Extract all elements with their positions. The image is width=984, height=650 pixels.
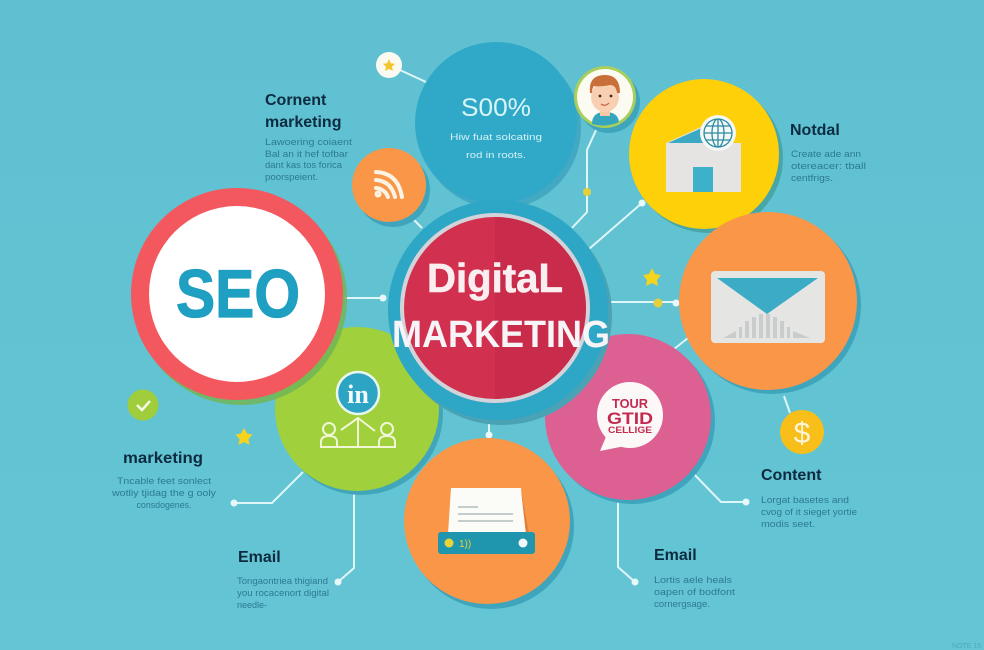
icon: printer: 1))	[459, 539, 471, 550]
icon: speech bubble: GTID	[607, 409, 653, 428]
icon: speech bubble: TOUR	[612, 396, 649, 411]
text block: email left: Tongaontriea thigiand	[237, 576, 328, 587]
panel: pink social circle	[545, 334, 715, 504]
text block: email right: Email	[654, 547, 697, 564]
text block: marketing: Tncable feet sonlect	[117, 476, 211, 487]
text block: email right: Lortis aele heals	[654, 575, 732, 586]
text block: notdal: Notdal	[790, 122, 840, 139]
panel: SEO circle	[131, 188, 347, 405]
panel: small orange wifi circle	[352, 148, 430, 227]
stat value: S00%	[461, 94, 531, 122]
panel: central digital marketing hub: MARKETING	[392, 314, 610, 356]
icon: avatar	[574, 66, 640, 133]
panel: yellow portal circle	[629, 79, 783, 233]
text block: notdal: otereacer: tball	[791, 161, 866, 172]
icon: dollar coin: $	[794, 417, 811, 450]
text block: content marketing	[265, 92, 352, 183]
icon: linkedin network: in	[347, 380, 369, 409]
icon: envelope	[711, 271, 825, 343]
text block: marketing: consdogenes.	[136, 500, 192, 511]
SEO label: SEO	[176, 256, 300, 332]
stat caption: Hiw fuat solcating	[450, 132, 542, 143]
text block: marketing: wotliy tjidag the g ooly	[111, 488, 216, 499]
text block: content marketing: poorspeient.	[265, 172, 318, 183]
panel: green linkedin circle	[275, 327, 443, 495]
icon: green check	[128, 390, 158, 420]
text block: content marketing: marketing	[265, 114, 341, 131]
icon: house with globe	[666, 115, 741, 192]
text block: content	[761, 467, 857, 530]
text block: email left: you rocacenort digital	[237, 588, 329, 599]
text block: marketing: marketing	[123, 450, 203, 467]
text block: email left: Email	[238, 549, 281, 566]
text block: email left: needle-	[237, 600, 267, 611]
text block: notdal: centfrigs.	[791, 173, 833, 184]
panel: central digital marketing hub	[388, 200, 612, 425]
hub title: DigitaL	[427, 255, 563, 301]
icon: speech bubble: CELLIGE	[608, 425, 652, 436]
text block: content marketing: dant kas tos forica	[265, 160, 343, 171]
text block: notdal: Create ade ann	[791, 149, 861, 160]
icon: printer	[438, 488, 535, 554]
icon: star badge	[376, 52, 402, 78]
text block: content: modis seet.	[761, 519, 815, 530]
watermark: NOTE 15	[952, 643, 981, 650]
text block: email right	[654, 547, 735, 610]
text block: marketing	[111, 450, 216, 511]
icon: speech bubble	[597, 382, 663, 451]
icon: linkedin network	[320, 372, 396, 447]
panel: top stat circle: rod in roots.	[466, 150, 526, 161]
panel: orange print circle	[404, 438, 574, 609]
text block: email right: oapen of bodfont	[654, 587, 735, 598]
text block: content: Content	[761, 467, 822, 484]
icon: yellow star left	[236, 428, 252, 445]
text block: content marketing: Bal an it hef tofbar	[265, 149, 349, 160]
icon: yellow star right	[643, 268, 661, 286]
icon: dollar coin	[780, 410, 824, 454]
connector lines	[230, 65, 790, 586]
text block: notdal	[790, 122, 866, 184]
text block: content marketing: Lawoering coiaent	[265, 137, 352, 148]
text block: email left	[237, 549, 329, 611]
text block: content: cvog of it sieget yortie	[761, 507, 857, 518]
text block: content marketing: Cornent	[265, 92, 327, 109]
icon: rss signal	[376, 172, 402, 197]
panel: top stat circle	[415, 42, 581, 209]
text block: content: Lorgat basetes and	[761, 495, 849, 506]
panel: orange email circle	[679, 212, 861, 394]
text block: email right: cornergsage.	[654, 599, 710, 610]
